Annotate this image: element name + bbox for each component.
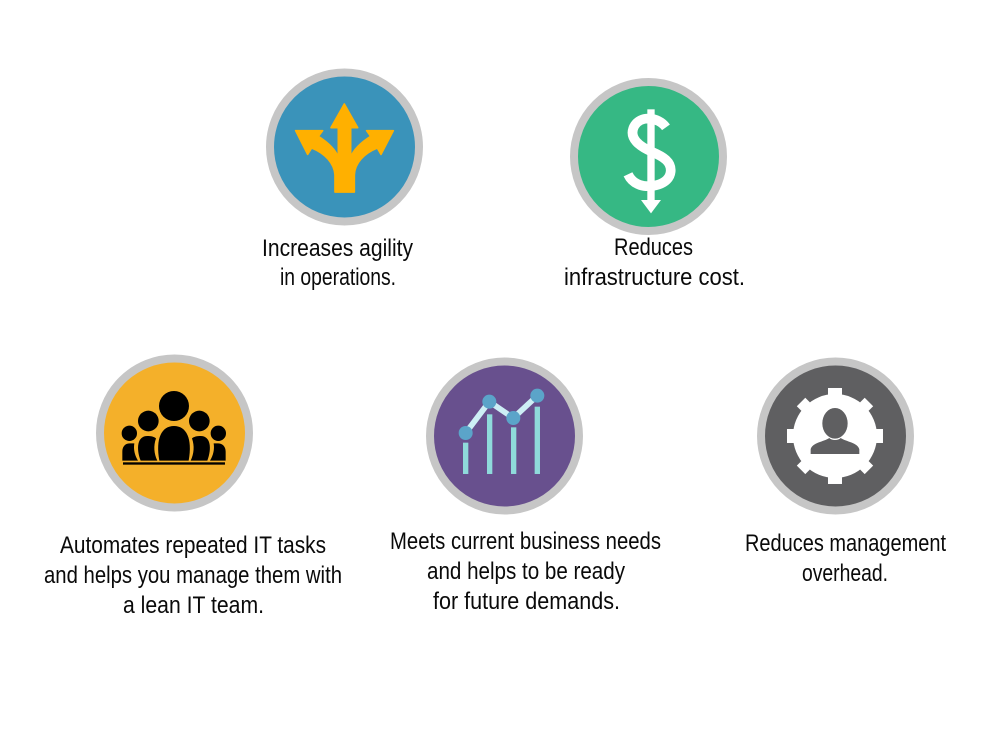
panel: reduces infrastructure cost [564, 82, 745, 291]
ring and disc: blue [270, 72, 419, 222]
ring and disc: purple [430, 362, 579, 510]
text: reduces management overhead: Reduces management [745, 530, 946, 557]
panel: meets business needs [390, 362, 661, 615]
text: meets business needs: and helps to be ready [427, 558, 625, 585]
text: automates IT tasks: a lean IT team. [123, 592, 264, 619]
text: reduces infrastructure cost [564, 234, 745, 291]
icon: gear with person [787, 388, 883, 484]
text: increases agility: in operations. [280, 264, 396, 291]
text: reduces infrastructure cost: infrastructure cost. [564, 264, 745, 291]
text: reduces management overhead: overhead. [802, 560, 888, 587]
text: increases agility [262, 235, 413, 291]
icon: line and bar chart [459, 389, 544, 474]
text: reduces management overhead [745, 530, 946, 587]
icon: dollar with down arrow [628, 109, 671, 213]
text: automates IT tasks: and helps you manage them with [44, 562, 342, 589]
panel: increases agility [262, 72, 419, 291]
ring and disc: green [574, 82, 723, 231]
text: meets business needs: Meets current business needs [390, 528, 661, 555]
text: meets business needs: for future demands. [433, 588, 620, 615]
text: increases agility: Increases agility [262, 235, 413, 262]
ring and disc: amber [100, 358, 249, 508]
ring and disc: dark grey [761, 362, 910, 510]
text: reduces infrastructure cost: Reduces [614, 234, 693, 261]
panel: reduces management overhead [745, 362, 946, 587]
icon: three-way arrow [296, 104, 393, 192]
text: automates IT tasks [44, 532, 342, 619]
text: meets business needs [390, 528, 661, 615]
panel: automates IT tasks [44, 358, 342, 619]
icon: team of people [122, 391, 226, 465]
text: automates IT tasks: Automates repeated IT tasks [60, 532, 326, 559]
